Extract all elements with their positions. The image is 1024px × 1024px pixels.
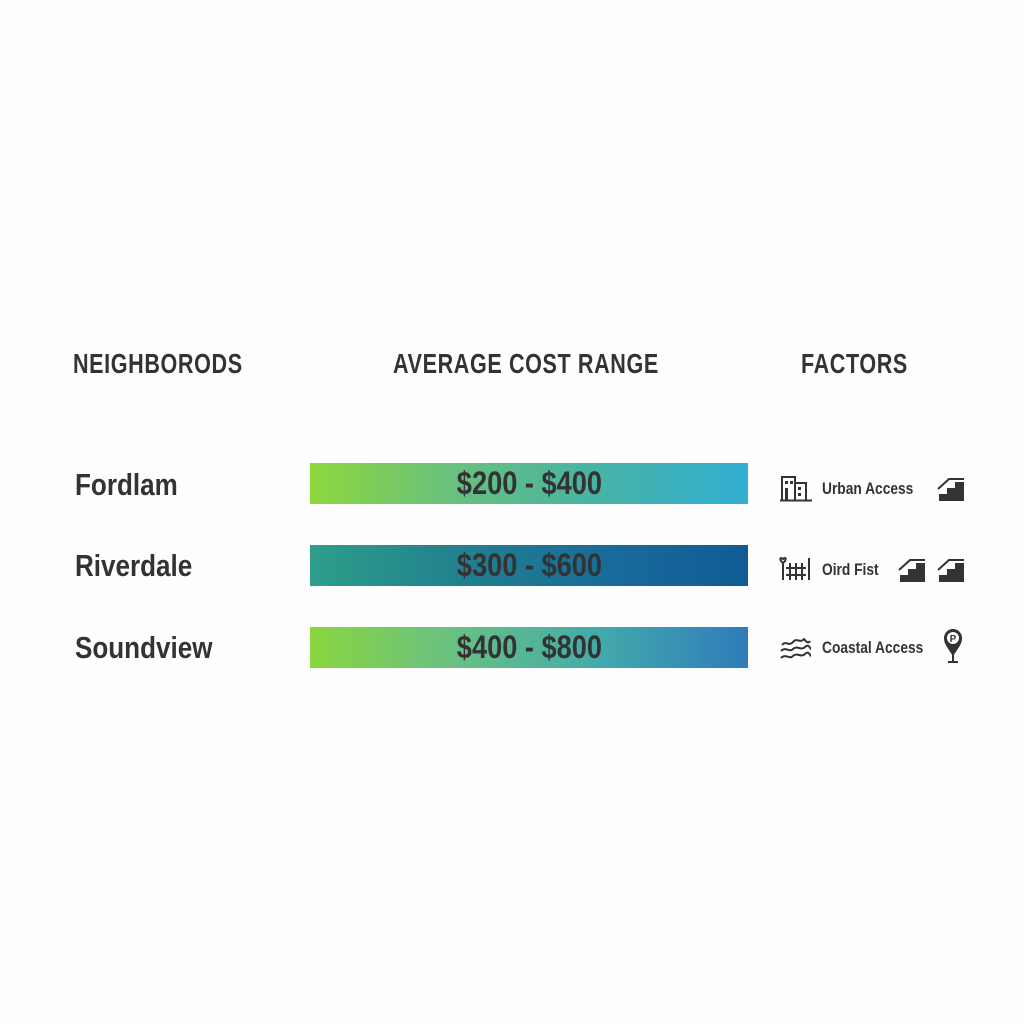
icon: buildings bbox=[780, 476, 812, 502]
bar: 400-800: $400 - $800 bbox=[456, 629, 602, 665]
label: Oird Fist: Oird Fist bbox=[822, 560, 879, 579]
label: Coastal Access: Coastal Access bbox=[822, 638, 923, 657]
header: average cost range: AVERAGE COST RANGE bbox=[393, 348, 659, 379]
icon: stairs bbox=[937, 478, 964, 501]
label: Urban Access: Urban Access bbox=[822, 479, 913, 498]
icon: parking pin: P bbox=[950, 634, 957, 645]
icon: fence bbox=[779, 557, 810, 580]
factor row 2 bbox=[779, 557, 964, 582]
header: factors: FACTORS bbox=[801, 348, 908, 379]
row name: Fordlam: Fordlam bbox=[75, 467, 178, 502]
icon: waves bbox=[780, 638, 812, 659]
bar: 200-400 bbox=[310, 463, 748, 504]
icon: stairs 2 bbox=[937, 559, 964, 582]
icon: stairs bbox=[898, 559, 925, 582]
bar: 200-400: $200 - $400 bbox=[456, 465, 602, 501]
bar: 300-600: $300 - $600 bbox=[456, 547, 602, 583]
header: neighborhoods: NEIGHBORODS bbox=[73, 348, 243, 379]
factor row 1 bbox=[780, 476, 964, 502]
row name: Soundview: Soundview bbox=[75, 630, 212, 665]
bar: 300-600 bbox=[310, 545, 748, 586]
bar: 400-800 bbox=[310, 627, 748, 668]
icon: parking pin bbox=[944, 629, 962, 663]
row name: Riverdale: Riverdale bbox=[75, 548, 192, 583]
factor row 3 bbox=[780, 629, 962, 663]
